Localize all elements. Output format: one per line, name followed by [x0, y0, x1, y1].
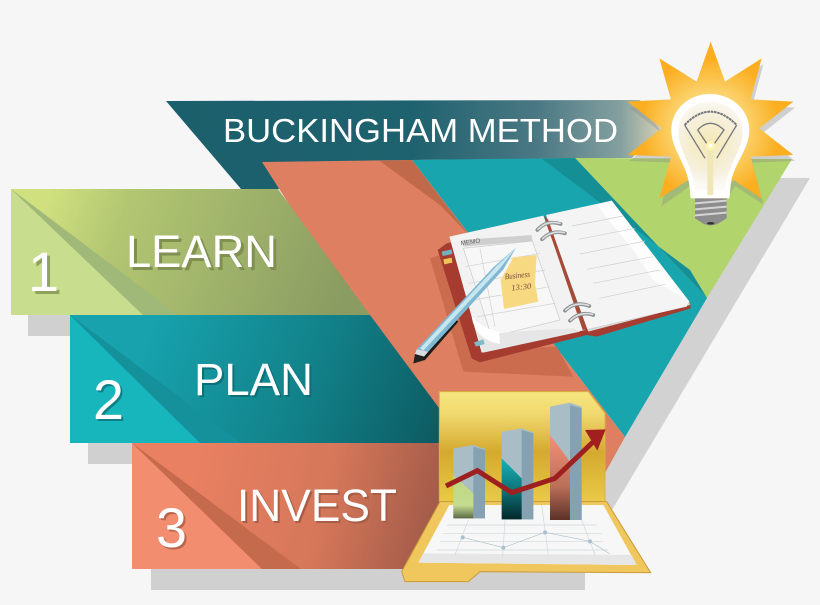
label: learn: LEARN	[126, 226, 277, 277]
pen	[413, 248, 516, 363]
label: invest: INVEST	[237, 480, 397, 531]
panel: green triangle	[572, 158, 792, 298]
label: plan: PLAN	[196, 356, 315, 407]
panel: step 3 invest	[132, 443, 445, 569]
sticky note: 13:30	[511, 282, 533, 293]
icon: light bulb	[628, 42, 795, 225]
label: invest: INVEST	[239, 482, 399, 533]
icon: notebook	[413, 201, 691, 377]
bulb glass	[671, 94, 749, 198]
memo text: MEMO	[460, 238, 481, 247]
filament	[685, 112, 737, 158]
bar 3	[550, 403, 582, 520]
number 3: 3	[156, 496, 187, 559]
drop shadows	[28, 178, 810, 590]
sticky note: Business	[504, 270, 530, 281]
mini line chart	[437, 505, 610, 557]
number 1: 1	[31, 243, 62, 306]
number 2: 2	[95, 370, 126, 433]
panel: salmon diagonal	[262, 160, 625, 500]
icon: chart folder	[402, 392, 651, 582]
bar 1	[453, 445, 485, 518]
dark salmon strip	[380, 160, 470, 236]
number 3: 3	[158, 498, 189, 561]
label: learn: LEARN	[129, 229, 280, 280]
label: plan: PLAN	[194, 354, 313, 405]
panel: step 1 learn	[11, 189, 370, 315]
sticky note	[501, 255, 538, 309]
rings	[537, 223, 593, 321]
dark teal strip	[542, 158, 707, 298]
screw base	[695, 198, 727, 225]
panel: teal triangle	[412, 158, 707, 437]
arrow: red trend	[446, 429, 606, 493]
number 2: 2	[93, 368, 124, 431]
panel: step 2 plan	[70, 315, 465, 443]
number 1: 1	[28, 240, 59, 303]
title: BUCKINGHAM METHOD	[223, 112, 618, 149]
top banner	[166, 100, 660, 189]
bar 2	[502, 428, 533, 519]
